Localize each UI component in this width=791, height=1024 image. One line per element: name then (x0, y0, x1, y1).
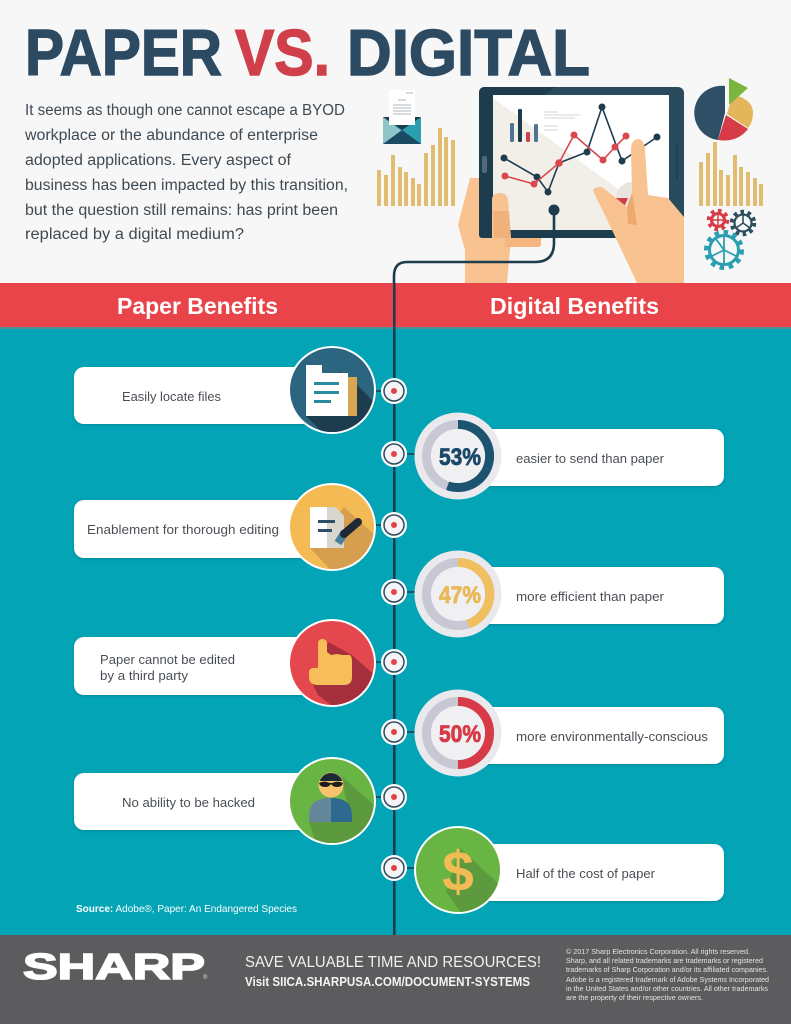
digital benefit: 47%: more efficient than paper (516, 589, 665, 604)
red line chart (502, 132, 630, 188)
logo: SHARP: SHARP (23, 946, 205, 987)
intro paragraph: business has been impacted by this transition, (25, 177, 348, 194)
intro paragraph: workplace or the abundance of enterprise (24, 127, 318, 144)
title: VS. (235, 16, 330, 89)
icon: dollar sign: $ (442, 840, 474, 904)
paper benefit: easily locate files: Easily locate files (122, 389, 221, 404)
intro paragraph: adopted applications. Every aspect of (25, 152, 292, 169)
mini bar chart on screen (510, 109, 538, 142)
icon: document and pen (310, 507, 358, 548)
footer (0, 935, 791, 1024)
timeline nodes (381, 378, 407, 881)
source note: Source: Adobe®, Paper: An Endangered Species (76, 903, 297, 915)
intro paragraph: replaced by a digital medium? (25, 226, 244, 243)
paper benefit: cannot be edited by third party: by a third party (100, 668, 188, 683)
legal text: are the property of their respective owners. (566, 993, 703, 1002)
legal text (566, 947, 769, 1002)
legal text: Sharp, and all related trademarks are trademarks or registered (566, 956, 763, 965)
title: PAPER (25, 16, 222, 89)
legal text: trademarks of Sharp Corporation and/or its affiliated companies. (566, 965, 768, 974)
digital benefit: half the cost (407, 826, 725, 914)
tablet (479, 87, 684, 238)
website link: Visit SIICA.SHARPUSA.COM/DOCUMENT-SYSTEMS (245, 975, 530, 989)
paper benefit: no ability to be hacked (74, 757, 384, 850)
teal content panel (0, 326, 791, 936)
paper benefit: thorough editing (74, 483, 384, 580)
icon: left palm (458, 178, 511, 283)
paper benefit: easily locate files (74, 346, 384, 440)
ring chart 50% (458, 702, 490, 764)
digital benefit: 53% (404, 412, 724, 500)
timeline spine (393, 283, 396, 935)
red header band (0, 283, 791, 329)
digital benefit: 50% (404, 690, 724, 776)
intro paragraph (24, 102, 348, 243)
ring chart 47% (458, 562, 490, 624)
digital benefit: 50%: more environmentally-conscious (516, 729, 709, 744)
ring chart 53% (448, 424, 490, 487)
icon: gears (706, 211, 754, 268)
paper benefit: cannot be edited by third party: Paper cannot be edited (100, 652, 235, 667)
bar chart: right gold bars (699, 142, 763, 206)
tiny caption lines on screen (544, 112, 580, 130)
digital benefit: 50%: 50% (439, 721, 481, 748)
icon: fingers under tablet (505, 238, 541, 247)
heading: Paper Benefits: Paper Benefits (117, 293, 278, 319)
digital benefit: 47%: 47% (439, 582, 481, 609)
icon: hacker figure (309, 771, 352, 822)
icon: file folder (306, 365, 357, 416)
title: DIGITAL (347, 16, 590, 89)
call to action: SAVE VALUABLE TIME AND RESOURCES! (245, 954, 541, 971)
paper benefit: thorough editing: Enablement for thorough editing (87, 522, 279, 537)
digital benefit: 47% (404, 550, 724, 638)
bar chart: left gold bars (377, 128, 455, 206)
wire from tablet to timeline (394, 206, 558, 935)
paper benefit: no ability to be hacked: No ability to be hacked (122, 795, 255, 810)
icon: right hand (593, 139, 684, 283)
legal text: in the United States and/or other countries. All other trademarks (566, 984, 768, 993)
small gauge on screen (616, 182, 632, 206)
icon: pointing hand (309, 639, 352, 685)
intro paragraph: It seems as though one cannot escape a BYOD (25, 102, 345, 119)
digital benefit: 53%: 53% (439, 444, 481, 471)
navy line chart (500, 104, 660, 196)
legal text: © 2017 Sharp Electronics Corporation. All rights reserved. (566, 947, 750, 956)
heading: Digital Benefits: Digital Benefits (490, 293, 659, 319)
icon: envelope with letter (383, 90, 421, 144)
legal text: Adobe is a registered trademark of Adobe Systems Incorporated (566, 975, 769, 984)
icon: left thumb (492, 193, 511, 238)
digital benefit: half the cost: Half of the cost of paper (516, 866, 656, 881)
paper benefit: cannot be edited by third party (73, 619, 381, 707)
pie chart (694, 78, 753, 141)
intro paragraph: but the question still remains: has print been (25, 202, 338, 219)
title (25, 16, 590, 89)
registered mark: ® (203, 974, 208, 981)
digital benefit: 53%: easier to send than paper (516, 451, 665, 466)
